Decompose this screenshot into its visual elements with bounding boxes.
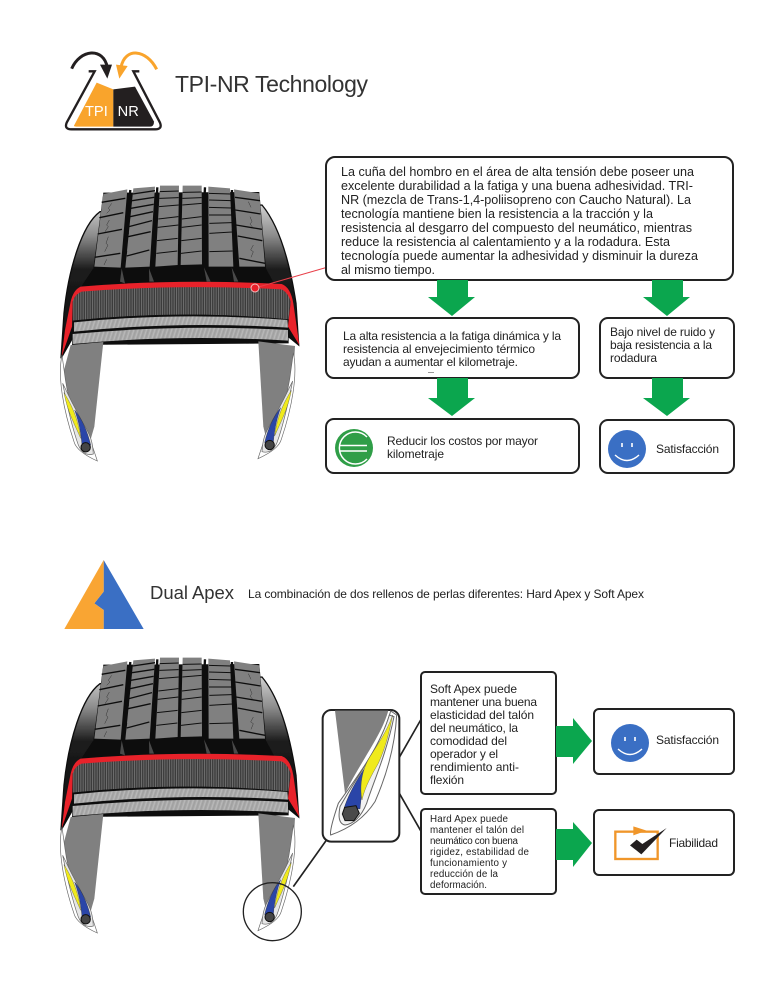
panel: Hard Apex: funcionamiento y	[430, 858, 507, 869]
panel: Soft Apex	[421, 672, 556, 794]
callout line to shoulder wedge	[251, 267, 328, 292]
panel: low noise: Bajo nivel de ruido y	[610, 325, 715, 339]
icon: euro coin	[335, 429, 373, 467]
icon: Dual Apex triangle logo	[64, 560, 144, 629]
panel: low noise: baja resistencia a la	[610, 338, 712, 352]
panel: shoulder wedge description: reduce la resistencia al calentamiento y a la rodadura. Esta	[341, 235, 670, 249]
panel: satisfaction, second	[594, 709, 734, 774]
panel: fatigue resistance: ayudan a aumentar el kilometraje.	[343, 355, 518, 369]
panel: shoulder wedge description: La cuña del hombro en el área de alta tensión debe poseer una	[341, 165, 694, 179]
panel: satisfaction: Satisfacción	[656, 442, 719, 456]
panel: shoulder wedge description: resistencia al desgarro del compuesto del neumático, mientras	[341, 221, 692, 235]
panel: reduced costs	[326, 419, 579, 473]
panel: Soft Apex: mantener una buena	[430, 695, 537, 709]
heading: Dual Apex: Dual Apex	[150, 582, 235, 603]
arrow: Hard Apex to reliability	[556, 822, 592, 867]
panel: Hard Apex	[421, 809, 556, 894]
panel: reduced costs: kilometraje	[387, 447, 444, 461]
panel: shoulder wedge description: tecnología puede aumentar la adhesividad y disminuir la dureza	[341, 249, 698, 263]
arrow: down to cost box	[428, 378, 475, 416]
panel: shoulder wedge description: excelente durabilidad a la fatiga y una buena adhesividad. TRI-	[341, 179, 693, 193]
panel: Hard Apex: mantener el talón del	[430, 825, 524, 836]
panel: Soft Apex: Soft Apex puede	[430, 682, 517, 696]
illustration: tire cross-section, second	[60, 658, 299, 933]
panel: Soft Apex: flexión	[430, 773, 464, 787]
panel: Hard Apex: deformación.	[430, 880, 487, 891]
panel: fatigue resistance: resistencia al envejecimiento térmico	[343, 342, 535, 356]
panel: reliability: Fiabilidad	[669, 836, 718, 850]
illustration: tire cross-section with shoulder wedge	[60, 186, 299, 461]
icon: TPI-NR flask logo: NR	[118, 104, 139, 120]
arrow: Soft Apex to satisfaction	[556, 718, 592, 764]
callout: bead detail with connectors	[243, 710, 421, 941]
panel: fatigue resistance	[326, 318, 579, 378]
panel: Soft Apex: del neumático, la	[430, 721, 518, 735]
panel: low noise: rodadura	[610, 351, 657, 365]
panel: shoulder wedge description: al mismo tiempo.	[341, 263, 435, 277]
arrow: down to satisfaction box	[643, 378, 690, 416]
panel: shoulder wedge description: NR (mezcla de Trans-1,4-poliisopreno con Caucho Natural). La	[341, 193, 691, 207]
panel: satisfaction, second: Satisfacción	[656, 733, 719, 747]
panel: shoulder wedge description	[326, 157, 733, 280]
panel: Hard Apex: rigidez, estabilidad de	[430, 847, 530, 858]
panel: reduced costs: Reducir los costos por mayor	[387, 434, 538, 448]
panel: shoulder wedge description: tecnología mantiene bien la resistencia a la tracción y la	[341, 207, 653, 221]
icon: smiley, second	[611, 724, 649, 762]
panel: Soft Apex: elasticidad del talón	[430, 708, 534, 722]
icon: orange checkbox with check	[615, 826, 667, 859]
panel: fatigue resistance: La alta resistencia a la fatiga dinámica y la	[343, 329, 561, 343]
panel: Soft Apex: rendimiento anti-	[430, 760, 519, 774]
icon: TPI-NR flask logo	[66, 53, 161, 129]
panel: Soft Apex: comodidad del	[430, 734, 507, 748]
panel: Soft Apex: operador y el	[430, 747, 498, 761]
arrow: down to fatigue box	[428, 280, 475, 316]
panel: Hard Apex: reducción de la	[430, 869, 499, 880]
icon: smiley	[608, 430, 646, 468]
icon: TPI-NR flask logo: TPI	[85, 104, 108, 120]
panel: reliability	[594, 810, 734, 875]
panel: low noise	[600, 318, 734, 378]
panel: Hard Apex: Hard Apex puede	[430, 814, 509, 825]
heading: TPI-NR Technology: TPI-NR Technology	[175, 71, 368, 97]
panel: satisfaction	[600, 420, 734, 473]
text: Dual Apex summary: La combinación de dos rellenos de perlas diferentes: Hard Apex y Soft Apex	[248, 587, 644, 601]
panel: Hard Apex: neumático con buena	[430, 836, 519, 847]
arrow: down to noise box	[643, 280, 690, 316]
